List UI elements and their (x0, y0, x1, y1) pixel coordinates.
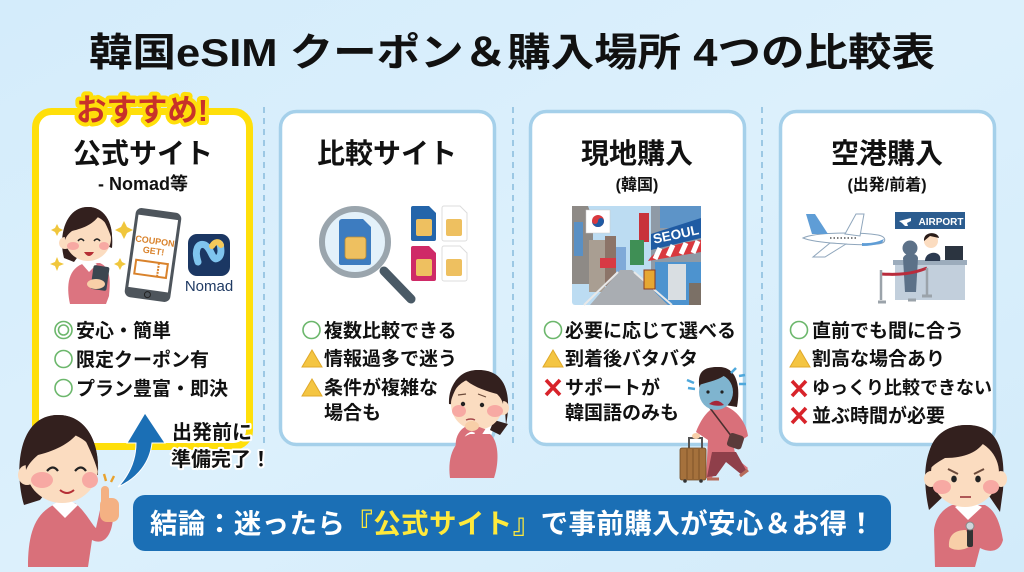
list: official site merits: 安心・簡単 (76, 319, 171, 342)
list: comparison site points: 複数比較できる (324, 320, 457, 342)
callout: ready before departure (171, 421, 271, 471)
list: official site merits: プラン豊富・即決 (76, 378, 228, 400)
conclusion banner: 結論：迷ったら『公式サイト』で事前購入が安心＆お得！ (150, 508, 875, 539)
recommended badge: おすすめ! (76, 93, 208, 128)
icon: Nomad app (185, 234, 233, 295)
list: airport purchase points: 直前でも間に合う (812, 320, 964, 342)
airport sign: AIRPORT (918, 217, 964, 228)
list: airport purchase points: 並ぶ時間が必要 (812, 404, 945, 427)
subheading: Korea: (韓国) (616, 176, 658, 194)
callout: ready before departure: 準備完了！ (171, 448, 271, 471)
list: local purchase points: サポートが (565, 376, 660, 399)
list: airport purchase points: 割高な場合あり (812, 348, 945, 370)
heading: local purchase: 現地購入 (581, 138, 693, 169)
subheading: departure or arrival: (出発/前着) (847, 175, 927, 194)
list: airport purchase points: ゆっくり比較できない (812, 378, 992, 398)
illustration: woman with smartphone (50, 207, 133, 304)
list: official site merits (55, 319, 228, 400)
illustration: airplane (803, 214, 885, 257)
heading: comparison site: 比較サイト (317, 138, 457, 169)
illustration: phone with coupon: GET! (142, 245, 165, 257)
illustration: Seoul street: SEOUL (652, 222, 700, 247)
icon: SIM cards (411, 206, 467, 281)
heading: official site: 公式サイト (73, 138, 213, 169)
title: 韓国eSIM クーポン＆購入場所 4つの比較表 (89, 32, 935, 75)
callout: ready before departure: 出発前に (172, 421, 252, 444)
list: local purchase points: 韓国語のみも (565, 402, 679, 424)
list: local purchase points: 到着後バタバタ (565, 348, 698, 370)
panel: local purchase (530, 112, 744, 444)
illustration: airport counter (878, 233, 967, 302)
list: comparison site points: 条件が複雑な (324, 376, 438, 399)
panel: airport purchase (780, 112, 994, 444)
panel: official site (36, 93, 250, 446)
list: official site merits: 限定クーポン有 (76, 348, 209, 371)
list: local purchase points: 必要に応じて選べる (565, 320, 736, 342)
list: comparison site points: 情報過多で迷う (324, 348, 457, 370)
airport sign (895, 212, 965, 229)
icon: magnifier over SIM (322, 209, 411, 299)
character: thumbs-up woman (18, 415, 119, 567)
illustration: Seoul street (572, 206, 701, 305)
heading: airport purchase: 空港購入 (831, 138, 943, 169)
conclusion banner (133, 495, 891, 551)
character: worried traveler with suitcase (680, 367, 748, 483)
icon: Nomad app: Nomad (185, 278, 233, 295)
list: airport purchase points (790, 320, 992, 427)
panel: comparison site (280, 112, 494, 444)
illustration: phone with coupon: COUPON (135, 233, 175, 249)
illustration: phone with coupon (124, 207, 182, 303)
list: comparison site points (302, 320, 457, 424)
list: comparison site points: 場合も (324, 402, 381, 424)
character: woman checking watch (924, 425, 1007, 567)
list: local purchase points (543, 320, 736, 424)
subheading: Nomad: - Nomad等 (98, 173, 188, 194)
arrow: up to departure preparation (118, 413, 165, 487)
character: thinking woman (449, 370, 509, 478)
